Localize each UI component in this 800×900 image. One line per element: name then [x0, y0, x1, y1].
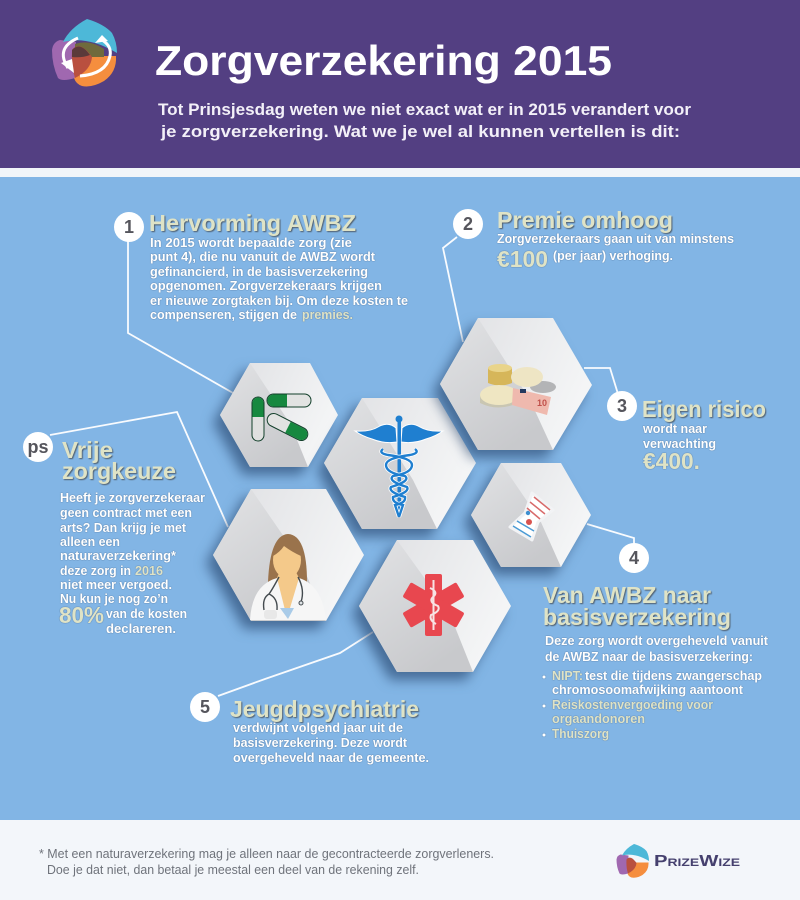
connector lines: [50, 237, 634, 696]
bullet list: chromosoomafwijking aantoont: [552, 683, 744, 697]
light strip: [0, 168, 800, 177]
body 1: er nieuwe zorgtaken bij. Om deze kosten te: [150, 294, 408, 308]
body ps: niet meer vergoed.: [60, 578, 172, 592]
number badge 3: [607, 391, 637, 421]
hexagon: doctor: [213, 489, 364, 621]
icon: pills: [252, 394, 311, 443]
body 2: Zorgverzekeraars gaan uit van minstens: [497, 232, 734, 246]
body 5: [233, 721, 429, 765]
section 2: premie omhoog: [453, 207, 734, 272]
section 4: van AWBZ naar basisverzekering: [542, 543, 769, 741]
body ps: geen contract met een: [60, 506, 192, 520]
body 1: punt 4), die nu vanuit de AWBZ wordt: [150, 250, 376, 264]
body ps: 80%: [59, 602, 104, 628]
blue main panel: [0, 177, 800, 820]
heading ps: [62, 437, 176, 484]
body 5: basisverzekering. Deze wordt: [233, 736, 408, 750]
body ps: alleen een: [60, 535, 120, 549]
section 5: jeugdpsychiatrie: [190, 692, 429, 765]
body 1: premies.: [302, 308, 353, 322]
number badge 4: [619, 543, 649, 573]
number badge 1: 1: [124, 217, 134, 237]
body 1: gefinancierd, in de basisverzekering: [150, 265, 368, 279]
heading 4: [543, 582, 731, 630]
wordmark: PrizeWize: [654, 853, 740, 870]
heading 4: Van AWBZ naar: [543, 582, 711, 608]
title: Zorgverzekering 2015: [155, 37, 612, 84]
icon: dna strand: [510, 493, 553, 540]
icon: caduceus: [355, 416, 443, 517]
bullet list: orgaandonoren: [552, 712, 645, 726]
body 3: verwachting: [643, 437, 716, 451]
body 1: In 2015 wordt bepaalde zorg (zie: [150, 236, 352, 250]
bullet list: test die tijdens zwangerschap: [585, 669, 762, 683]
body 4: [545, 634, 769, 664]
heading ps: Vrije: [62, 437, 113, 463]
intro text: [158, 100, 691, 141]
bullet list: Reiskostenvergoeding voor: [552, 698, 713, 712]
footer logo PrizeWize: [616, 844, 740, 878]
footer band: [0, 820, 800, 900]
footnote: * Met een naturaverzekering mag je alleen naar de gecontracteerde zorgverleners.: [39, 847, 494, 861]
number badge 5: 5: [200, 697, 210, 717]
footnote: [39, 847, 494, 877]
icon: doctor: [250, 534, 326, 620]
intro text: je zorgverzekering. Wat we je wel al kunnen vertellen is dit:: [160, 122, 680, 141]
body ps: van de kosten: [106, 607, 187, 621]
body 4: Deze zorg wordt overgeheveld vanuit: [545, 634, 769, 648]
logo: [52, 19, 117, 86]
heading 5: Jeugdpsychiatrie: [230, 696, 419, 722]
bullet list: NIPT:: [552, 669, 583, 683]
hexagon: dna: [471, 463, 591, 567]
hexagon: star of life: [359, 540, 511, 672]
icon: coins, tablets and banknote: [480, 364, 556, 415]
body 2: [497, 232, 734, 272]
section 1: hervorming AWBZ: [114, 210, 408, 322]
body ps: deze zorg in: [60, 564, 131, 578]
intro text: Tot Prinsjesdag weten we niet exact wat er in 2015 verandert voor: [158, 100, 691, 119]
body 5: verdwijnt volgend jaar uit de: [233, 721, 403, 735]
body 3: €400.: [643, 448, 700, 474]
badge ps: ps: [27, 437, 49, 457]
body ps: declareren.: [106, 622, 176, 636]
footnote: Doe je dat niet, dan betaal je meestal een deel van de rekening zelf.: [47, 863, 419, 877]
icon: coins, tablets and banknote: 10: [537, 398, 547, 408]
number badge 2: 2: [463, 214, 473, 234]
body ps: naturaverzekering*: [60, 549, 176, 563]
hexagon: pills: [220, 363, 338, 467]
body ps: 2016: [135, 564, 163, 578]
body 1: compenseren, stijgen de: [150, 308, 297, 322]
body 5: overgeheveld naar de gemeente.: [233, 751, 429, 765]
number badge 4: 4: [629, 548, 639, 568]
heading 4: basisverzekering: [543, 604, 731, 630]
number badge 5: [190, 692, 220, 722]
section 3: eigen risico: [607, 391, 766, 474]
number badge 2: [453, 209, 483, 239]
header band: [0, 0, 800, 168]
heading 2: Premie omhoog: [497, 207, 673, 233]
body 1: opgenomen. Zorgverzekeraars krijgen: [150, 279, 382, 293]
body ps: arts? Dan krijg je met: [60, 521, 187, 535]
body ps: Nu kun je nog zo’n: [60, 592, 168, 606]
bullet list: [542, 669, 762, 741]
heading ps: zorgkeuze: [62, 458, 176, 484]
body 4: de AWBZ naar de basisverzekering:: [545, 650, 753, 664]
body 2: €100: [497, 246, 548, 272]
hexagon: money: [440, 318, 592, 450]
body 2: (per jaar) verhoging.: [553, 249, 673, 263]
body ps: [59, 491, 205, 636]
logo mark small: [616, 844, 649, 878]
body ps: Heeft je zorgverzekeraar: [60, 491, 205, 505]
body 3: wordt naar: [642, 422, 707, 436]
body 3: [642, 422, 716, 474]
hexagon: caduceus: [324, 398, 476, 529]
bullet list: Thuiszorg: [552, 727, 609, 741]
section ps: vrije zorgkeuze: [23, 432, 205, 636]
icon: star of life: [402, 574, 465, 636]
number badge 1: [114, 212, 144, 242]
heading 3: Eigen risico: [642, 396, 766, 422]
badge ps: [23, 432, 53, 462]
heading 1: Hervorming AWBZ: [149, 210, 356, 236]
body 1: [150, 236, 408, 322]
number badge 3: 3: [617, 396, 627, 416]
